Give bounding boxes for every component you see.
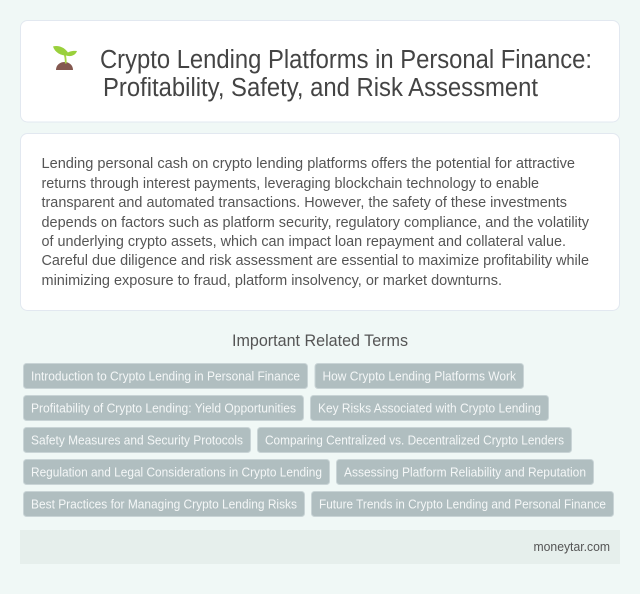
title: [100, 46, 592, 102]
text block: summary: [42, 156, 590, 289]
tag: future trends: Future Trends in Crypto Lending and Personal Finance: [319, 498, 606, 512]
tag: centralized vs decentralized: [258, 428, 572, 452]
tag: platform reliability: [336, 460, 594, 484]
tag: future trends: [312, 492, 614, 516]
text block: summary: transparent and automated transactions. However, the safety of these investments: [42, 195, 567, 211]
tag: how platforms work: How Crypto Lending Platforms Work: [322, 370, 517, 384]
text block: summary: Careful due diligence and risk assessment are essential to maximize profitability while: [42, 253, 589, 269]
tag: how platforms work: [315, 364, 524, 388]
tag: key risks: Key Risks Associated with Crypto Lending: [318, 402, 541, 416]
tag: key risks: [310, 396, 548, 420]
text block: summary: returns through interest payments, leveraging blockchain technology to enable: [42, 176, 539, 192]
text block: summary: depends on factors such as platform security, regulatory compliance, and the volatility: [42, 215, 590, 231]
tag: regulation: [24, 460, 330, 484]
tag: regulation: Regulation and Legal Considerations in Crypto Lending: [31, 466, 322, 480]
tag: introduction: [24, 364, 308, 388]
text block: summary: minimizing exposure to fraud, platform insolvency, or market downturns.: [42, 273, 502, 289]
tag: profitability: [24, 396, 304, 420]
footer: moneytar.com: [534, 539, 610, 554]
tag: best practices: Best Practices for Managing Crypto Lending Risks: [31, 498, 297, 512]
tag: platform reliability: Assessing Platform Reliability and Reputation: [344, 466, 586, 480]
tag: safety measures: [24, 428, 250, 452]
footer: [20, 530, 620, 564]
tag: profitability: Profitability of Crypto Lending: Yield Opportunities: [31, 402, 296, 416]
tag: best practices: [24, 492, 304, 516]
heading: important related terms: Important Related Terms: [232, 332, 408, 350]
panel: related term tags: [24, 364, 614, 516]
icon: sprout: [53, 46, 77, 70]
tag: introduction: Introduction to Crypto Lending in Personal Finance: [31, 370, 300, 384]
text block: summary: of underlying crypto assets, which can impact loan repayment and collateral value.: [42, 234, 566, 250]
text block: summary: Lending personal cash on crypto lending platforms offers the potential for attractive: [42, 156, 575, 172]
tag: safety measures: Safety Measures and Security Protocols: [31, 434, 243, 448]
panel: summary paragraph: [20, 134, 620, 310]
title: Crypto Lending Platforms in Personal Finance:: [100, 46, 592, 74]
tag: centralized vs decentralized: Comparing Centralized vs. Decentralized Crypto Lenders: [265, 434, 564, 448]
title: Profitability, Safety, and Risk Assessment: [103, 74, 538, 102]
panel: title card: [20, 20, 620, 122]
